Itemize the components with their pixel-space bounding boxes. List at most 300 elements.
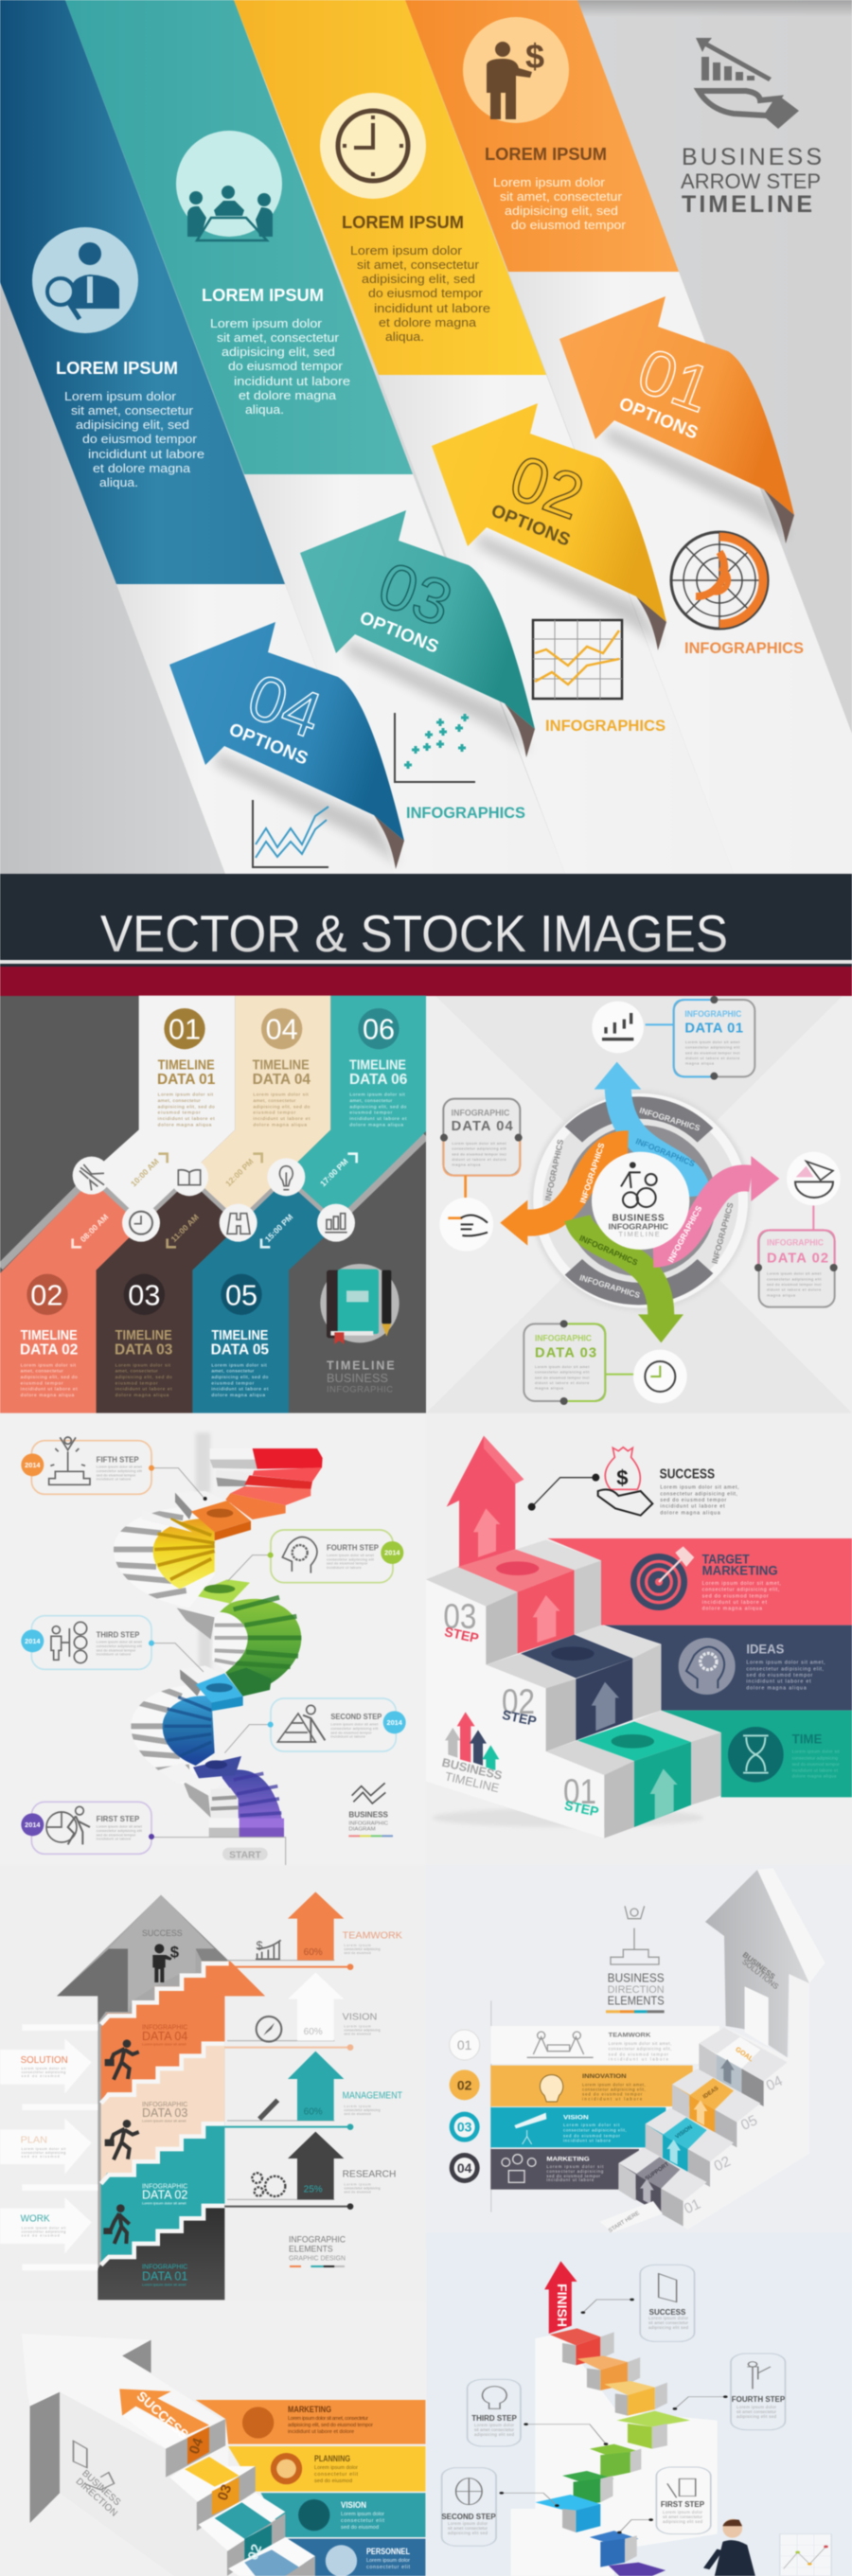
item: teamwork: $ (256, 1939, 263, 1952)
item: management: sed do eiusmod (344, 2112, 371, 2116)
arrow: 04 options: 04 (239, 660, 330, 753)
callout: second step: incididunt ut labore (330, 1734, 366, 1739)
arrow: pink (653, 1156, 779, 1254)
block: target marketing: incididunt ut labore et (702, 1600, 768, 1606)
arrow: 01 options: 01 (629, 334, 720, 427)
callout: data 03: Lorem ipsum dolor sit amet (535, 1364, 590, 1369)
block: target marketing: Lorem ipsum dolor sit amet, (702, 1581, 781, 1587)
text: data 02: DATA 02 (142, 2189, 187, 2202)
hero column text: teal: LOREM IPSUM (202, 286, 324, 305)
caption: timeline business infographic: INFOGRAPHIC (327, 1385, 393, 1395)
block: time: incididunt ut labore et (792, 1768, 839, 1773)
arrow left dark fold (30, 2392, 60, 2523)
band: innovation: consectetur adipisicing elit, (582, 2087, 646, 2091)
hero column text: teal: aliqua. (245, 402, 284, 417)
text: business direction labels: 04 (186, 2435, 207, 2457)
block: success: Lorem ipsum dolor sit amet, (660, 1485, 739, 1491)
text: finish stairs labels (441, 2283, 786, 2535)
hero column text: teal: adipisicing elit, sed (222, 345, 335, 359)
band: time (661, 1711, 852, 1797)
block: success: $ (616, 1466, 628, 1489)
timeline data 03: incididunt ut labore et (115, 1387, 172, 1393)
callout: data 04: INFOGRAPHIC (452, 1108, 510, 1117)
text: data 03: INFOGRAPHIC (142, 2100, 188, 2108)
title: business arrow step timeline: BUSINESS (682, 144, 822, 170)
hero column text: orange: sit amet, consectetur (500, 189, 623, 204)
icon: binoculars (220, 1204, 257, 1242)
stair step 04 goal (699, 2028, 788, 2106)
text: business direction labels: SUCCESS (133, 2388, 192, 2443)
stair band: cream 03 (101, 2042, 224, 2182)
left bar (490, 2000, 491, 2212)
timeline data 05: adipisicing elit, sed do (211, 1375, 269, 1380)
left thin bars (22, 2024, 98, 2270)
timeline data 06: dolore magna aliqua (349, 1122, 403, 1128)
panel: business direction elements (426, 1865, 852, 2248)
caption: infographic elements graphic design: ELEMENTS (289, 2244, 333, 2253)
hero column text: yellow: aliqua. (385, 329, 424, 344)
band: cream 04 (189, 996, 330, 1219)
arrow label: SOLUTIONS (740, 1958, 780, 1991)
text: business direction labels: consectetur elit (366, 2565, 410, 2570)
text: data 03: Lorem ipsum dolor sit amet (142, 2119, 187, 2123)
callout: data 04 (439, 1099, 523, 1252)
timeline data 03: amet, consectetur (115, 1369, 158, 1375)
callout: second step: Lorem ipsum dolor sit amet (330, 1722, 379, 1727)
caption: timeline business infographic: TIMELINE (327, 1359, 395, 1373)
strip: teal (65, 0, 413, 474)
item: teamwork: consectetur adipisicing (344, 1947, 381, 1951)
panel: timeline business infographic (0, 996, 426, 1413)
callout: data 04: magna aliqua (452, 1163, 481, 1167)
hero column text: blue: LOREM IPSUM (56, 359, 178, 378)
callout: data 03: consectetur adipisicing elit (535, 1370, 590, 1375)
block: target marketing: sed do eiusmod tempor (702, 1593, 769, 1599)
text: finish stairs labels: sit amet consectetur (737, 2409, 776, 2414)
timeline data 06 (349, 1008, 407, 1128)
text: data 01: Lorem ipsum dolor sit amet (142, 2282, 187, 2286)
ring labels: INFOGRAPHICS (578, 1234, 639, 1268)
callout: data 01: Lorem ipsum dolor sit amet (685, 1039, 740, 1044)
callout: fourth step: sed do eiusmod tempor (327, 1561, 368, 1566)
caption: infographic elements graphic design (289, 2234, 346, 2267)
strip: orange (405, 0, 679, 272)
band: marketing: Lorem ipsum dolor sit (546, 2164, 604, 2169)
arrow notch grey (122, 2340, 151, 2373)
timeline data 04: eiusmod tempor (253, 1110, 296, 1116)
item: teamwork: Lorem ipsum (344, 1944, 371, 1947)
logo: business timeline: BUSINESS (440, 1756, 504, 1783)
band: marketing (490, 2149, 639, 2190)
finish arrow (544, 2261, 577, 2334)
ring labels: INFOGRAPHICS (710, 1201, 736, 1265)
time labels: 15:00 PM (263, 1212, 294, 1244)
text: finish stairs labels: sit amet consectetur (648, 2320, 689, 2325)
title: business arrow step timeline: TIMELINE (682, 191, 812, 218)
hero column text: yellow: et dolore magna (379, 315, 477, 329)
icon: clock (320, 93, 426, 199)
stair band: teal 02 (101, 2123, 224, 2263)
step numbers (682, 2072, 786, 2217)
timeline data 05: TIMELINE (211, 1328, 268, 1343)
text: finish stairs labels: SECOND STEP (441, 2513, 496, 2521)
block: ideas: dolore magna aliqua (746, 1685, 807, 1691)
timeline data 01 (157, 1008, 216, 1128)
callout: first step: 2014 (25, 1821, 41, 1829)
text: business direction labels: sed do eiusmod (314, 2478, 352, 2484)
step labels: 02 (502, 1682, 535, 1721)
hero column text: teal (202, 286, 350, 417)
text: success and person: SUCCESS (142, 1928, 183, 1938)
callout: second step: 2014 (387, 1718, 403, 1727)
icon: businessman with dollar: $ (525, 37, 544, 76)
timeline data 01: adipisicing elit, sed do (158, 1104, 215, 1110)
callout: fifth step: Lorem ipsum dolor sit amet (97, 1465, 143, 1469)
icon: bar chart (317, 1204, 355, 1242)
caption: timeline business infographic (327, 1359, 395, 1395)
item: research: consectetur adipisicing (344, 2186, 381, 2190)
timeline data 01: 01 (169, 1014, 201, 1046)
block: time: consectetur adipisicing (792, 1755, 838, 1760)
number badges (450, 2030, 480, 2183)
white stair mass (618, 1974, 809, 2230)
text: data 04: DATA 04 (142, 2030, 187, 2043)
time chevrons (73, 1154, 357, 1247)
callout: data 03: INFOGRAPHIC (535, 1334, 592, 1343)
callout: fifth step: consectetur adipisicing elit (97, 1468, 143, 1473)
timeline data 04: 04 (266, 1014, 298, 1046)
text: finish stairs labels: FIRST STEP (661, 2500, 705, 2509)
panel: circular arrows infographic (426, 996, 852, 1413)
icon: businessman with dollar (463, 17, 569, 123)
icon: book and pen (320, 1264, 399, 1344)
leader lines (502, 2300, 725, 2532)
block: time (728, 1727, 840, 1783)
arrow: plan: sed do eiusmod (22, 2155, 60, 2159)
text: data 01 (142, 2263, 188, 2286)
timeline data 04: adipisicing elit, sed do (253, 1104, 311, 1110)
callout: first step: Lorem ipsum dolor sit amet (97, 1824, 143, 1829)
callout: data 04: DATA 04 (452, 1119, 514, 1134)
timeline data 02: eiusmod tempor (21, 1380, 63, 1386)
timeline data 01: eiusmod tempor (158, 1110, 201, 1116)
text: success and person: $ (170, 1943, 180, 1961)
text: business direction labels: Lorem ipsum dolor (314, 2465, 358, 2471)
title: business arrow step timeline: ARROW STEP (681, 169, 821, 193)
arrow top face (757, 1868, 825, 1983)
step 03 block (426, 1540, 601, 1664)
text: business direction labels: PLANNING (314, 2454, 350, 2464)
hero column text: teal: et dolore magna (239, 388, 337, 402)
number badges: 02 (457, 2077, 472, 2092)
stairs: lower purple flight (183, 1769, 284, 1838)
band: planning (228, 2446, 425, 2492)
item: research: sed do eiusmod (344, 2190, 371, 2194)
arrow: 02 options: OPTIONS (488, 501, 573, 551)
block: target marketing: dolore magna aliqua (702, 1607, 762, 1612)
time labels: 08:00 AM (79, 1212, 110, 1244)
arrow: green (577, 1218, 683, 1342)
callout: data 02: DATA 02 (767, 1251, 828, 1266)
runner icon: teal (103, 2204, 130, 2244)
arrow: work (0, 2197, 92, 2254)
text: finish stairs labels: Lorem ipsum dolor (474, 2423, 515, 2427)
text: success and person (142, 1928, 183, 1982)
callout: fourth step: FOURTH STEP (327, 1542, 379, 1552)
timeline data 02: amet, consectetur (21, 1369, 63, 1375)
arrow: 04 options: OPTIONS (226, 720, 311, 770)
band circles (242, 2407, 357, 2576)
callout: third step (21, 1616, 204, 1672)
band: vision: sed do eiusmod tempor (563, 2133, 621, 2138)
block: success (528, 1448, 739, 1516)
white stair tower (511, 2334, 718, 2576)
text: finish stairs labels: sit amet consectetur (474, 2427, 515, 2432)
text: business direction labels: Lorem ipsum dolor sit amet, consectetur (288, 2416, 368, 2422)
band: personnel (288, 2539, 425, 2576)
caption: business infographic diagram: DIAGRAM (348, 1826, 376, 1832)
timeline data 04: DATA 04 (253, 1072, 311, 1088)
label: start: START (229, 1850, 262, 1860)
hero column text: orange: adipisicing elit, sed (505, 204, 618, 218)
chart: yellow line grid (533, 620, 622, 699)
timeline data 01: dolore magna aliqua (158, 1122, 212, 1128)
band: teal 06 (286, 996, 426, 1219)
block: ideas: consectetur adipisicing elit, (746, 1666, 824, 1672)
arrow: solution (0, 2038, 92, 2094)
hero column text: blue: Lorem ipsum dolor (64, 389, 177, 403)
timeline data 03: dolore magna aliqua (115, 1393, 169, 1398)
block: ideas: IDEAS (746, 1642, 784, 1657)
strip: yellow (234, 0, 546, 375)
time labels: 17:00 PM (318, 1157, 350, 1188)
hero column text: blue: aliqua. (99, 475, 138, 489)
hero column text: blue (56, 359, 204, 489)
timeline data 02: dolore magna aliqua (21, 1393, 75, 1398)
callout: data 02: sed do eiusmod tempor inci (767, 1282, 821, 1287)
seam lines (0, 1136, 426, 1267)
item: vision: sed do eiusmod (344, 2033, 371, 2036)
hero column text: teal: Lorem ipsum dolor (210, 316, 323, 330)
callout: fourth step: 2014 (384, 1549, 400, 1557)
text: business direction labels: sed do eiusmod (341, 2525, 379, 2531)
text: finish stairs labels: THIRD STEP (471, 2414, 517, 2423)
band: vision (490, 2107, 666, 2147)
arrow: work: WORK (21, 2214, 50, 2225)
timeline data 05: incididunt ut labore et (211, 1387, 269, 1393)
step numbers: 04 (764, 2072, 786, 2094)
block: success: SUCCESS (660, 1467, 715, 1483)
arrow: work: consectetur adipisicing (22, 2230, 65, 2233)
hero column text: orange: LOREM IPSUM (485, 145, 607, 164)
callout: first step: FIRST STEP (97, 1814, 140, 1823)
ring labels (543, 1106, 736, 1300)
text: business direction labels: DIRECTION (74, 2477, 119, 2519)
item: vision: 60% (304, 2027, 323, 2037)
arrow: 02 options (432, 403, 666, 650)
text: finish stairs labels: sit amet consectetur (448, 2526, 488, 2531)
callout: fifth step (21, 1437, 204, 1498)
text: finish stairs labels: Lorem ipsum dolor (648, 2316, 689, 2320)
icon: meeting table (176, 131, 282, 240)
item: teamwork: TEAMWORK (343, 1930, 402, 1941)
band: coral 02 (0, 1181, 141, 1413)
arrow: 01 options: OPTIONS (616, 394, 701, 444)
text: business direction labels: BUSINESS (80, 2468, 122, 2508)
text: business direction labels: 03 (215, 2482, 235, 2503)
timeline data 06: Lorem ipsum dolor sit (349, 1093, 405, 1098)
timeline data 01: amet, consectetur (158, 1098, 201, 1104)
block: target marketing: consectetur adipisicing elit, (702, 1588, 779, 1593)
callout: data 01: consectetur adipisicing elit (685, 1045, 740, 1050)
timeline data 06: amet, consectetur (349, 1098, 393, 1104)
stair step 02 teal: VISION (675, 2124, 694, 2141)
item: research: RESEARCH (343, 2169, 396, 2179)
stair step 01 dark: SUPPORT (645, 2161, 670, 2182)
callout: data 02: INFOGRAPHIC (767, 1238, 824, 1248)
timeline data 02: Lorem ipsum dolor sit (21, 1362, 77, 1368)
text: finish stairs labels: Lorem ipsum dolor (663, 2510, 702, 2514)
white arrow body (22, 2334, 228, 2576)
text: data 02 (142, 2182, 188, 2205)
step numbers: 05 (738, 2112, 760, 2134)
arrow: 04 options (169, 622, 404, 869)
timeline data 04: TIMELINE (253, 1057, 310, 1073)
callout: third step: Lorem ipsum dolor sit amet (97, 1640, 143, 1644)
callout: third step: consectetur adipisicing elit (97, 1643, 143, 1648)
item: teamwork: sed do eiusmod (344, 1951, 371, 1955)
caption: business infographic diagram: BUSINESS (348, 1810, 389, 1819)
text: business direction labels: adipisicing elit, sed do eiusmod tempor (288, 2423, 373, 2428)
band: marketing: sed do eiusmod tempor (546, 2174, 601, 2178)
callout: data 03 (524, 1320, 687, 1405)
title: business direction elements: BUSINESS (608, 1971, 665, 1984)
callout: fourth step (228, 1530, 403, 1583)
panel: finish stairs shapes (427, 2234, 852, 2576)
timeline data 05: DATA 05 (211, 1342, 269, 1359)
callout: second step: consectetur adipisicing elit (330, 1726, 379, 1731)
band: teamwork: TEAMWORK (609, 2033, 651, 2039)
item: teamwork (224, 1892, 402, 1970)
block: ideas (679, 1638, 825, 1695)
timeline data 03: TIMELINE (115, 1328, 172, 1343)
text: data 03: DATA 03 (142, 2106, 187, 2120)
block: success: dolore magna aliqua (660, 1510, 720, 1516)
band: marketing: consectetur adipisicing (546, 2169, 604, 2174)
big arrow base (57, 1895, 265, 2300)
callout: data 02: magna aliqua (767, 1292, 796, 1297)
band: vision: incididunt ut labore (563, 2139, 612, 2143)
text: data 03 (142, 2100, 188, 2123)
timeline data 03: Lorem ipsum dolor sit (115, 1362, 171, 1368)
callout: third step: sed do eiusmod tempor (97, 1647, 136, 1652)
hero column text: yellow: do eiusmod tempor (368, 286, 484, 300)
label: start (222, 1848, 268, 1860)
logo: business timeline (440, 1712, 504, 1795)
callout: first step: consectetur adipisicing elit (97, 1828, 143, 1833)
stair shadows (196, 1432, 211, 1669)
block: ideas: incididunt ut labore et (746, 1679, 811, 1685)
block: time: sed do eiusmod tempor (792, 1762, 840, 1767)
item: research: Lorem ipsum (344, 2182, 371, 2186)
panel: spiral staircase (0, 1413, 426, 1871)
shadow (433, 1808, 703, 1827)
callout: first step: sed do eiusmod tempor (97, 1832, 136, 1837)
band: blue 05 (192, 1181, 336, 1413)
panel: business direction success arrow shapes (0, 2302, 427, 2576)
panel: 3d stairs success (426, 1413, 852, 1868)
text: business direction labels: VISION (341, 2500, 366, 2511)
ring (530, 1091, 751, 1311)
caption: timeline business infographic: BUSINESS (327, 1372, 388, 1385)
text: data 02: Lorem ipsum dolor sit amet (142, 2200, 187, 2205)
timeline data 04: amet, consectetur (253, 1098, 296, 1104)
ring labels: INFOGRAPHICS (577, 1142, 607, 1204)
stair band: orange 04 (101, 1962, 265, 2102)
item: management: Lorem ipsum (344, 2105, 371, 2108)
callout: data 01 (592, 996, 754, 1080)
text: finish stairs labels: SUCCESS (649, 2308, 686, 2317)
band: marketing (196, 2400, 425, 2444)
hero column text: teal: do eiusmod tempor (228, 359, 344, 373)
hero column text: yellow: adipisicing elit, sed (362, 272, 475, 286)
band: innovation: sed do eiusmod tempor (582, 2091, 643, 2096)
callout frames (442, 2265, 785, 2546)
center hub (592, 1152, 689, 1250)
band: teamwork: sed do eiusmod tempor (609, 2052, 669, 2056)
arrow: 01 options (559, 296, 794, 543)
panel: arrow stair infographic elements (0, 1865, 426, 2300)
runner icon: cream (105, 2120, 139, 2159)
icon: clock (122, 1204, 160, 1242)
band: innovation (490, 2066, 693, 2106)
caption: business infographic diagram: INFOGRAPHIC (348, 1821, 388, 1826)
callout: third step: 2014 (25, 1637, 41, 1645)
icon: plane (73, 1157, 111, 1195)
hero column text: blue: do eiusmod tempor (82, 432, 198, 446)
orange arrow on stairs (119, 2389, 209, 2435)
text: finish stairs labels: FINISH (555, 2283, 570, 2327)
timeline data 04: Lorem ipsum dolor sit (253, 1093, 309, 1098)
chart: blue line (253, 800, 328, 867)
big pink arrow (447, 1436, 524, 1567)
hero column text: orange (485, 145, 627, 232)
title: business direction elements (606, 1906, 665, 2013)
stair step 03 orange (672, 2069, 760, 2147)
start here strip: START HERE (608, 2211, 641, 2234)
time labels: 10:00 AM (129, 1157, 161, 1188)
timeline data 02: adipisicing elit, sed do (21, 1375, 78, 1380)
callout: data 02: didunt ut labore et dolore (767, 1288, 822, 1292)
callout: fourth step: Lorem ipsum dolor sit amet (327, 1553, 375, 1557)
hero column text: yellow: LOREM IPSUM (342, 213, 464, 232)
timeline data 06: incididunt ut labore et (349, 1116, 407, 1122)
callout: data 01: magna aliqua (685, 1061, 715, 1066)
band: teamwork (490, 2026, 719, 2064)
item: vision: Lorem ipsum (344, 2025, 371, 2029)
callout: data 03: didunt ut labore et dolore (535, 1380, 590, 1385)
band: white 01 (92, 996, 235, 1219)
stairs: blue flight (126, 1665, 243, 1785)
center hub: BUSINESS (612, 1213, 665, 1223)
arrow: 02 options: 02 (501, 441, 593, 534)
timeline data 06: TIMELINE (349, 1057, 406, 1073)
title: business arrow step timeline (681, 144, 822, 218)
text: business direction labels: Lorem ipsum dolor (341, 2512, 384, 2517)
block: time: Lorem ipsum dolor sit (792, 1750, 840, 1754)
icon: open book (170, 1158, 208, 1196)
callout: data 02 (754, 1152, 841, 1307)
